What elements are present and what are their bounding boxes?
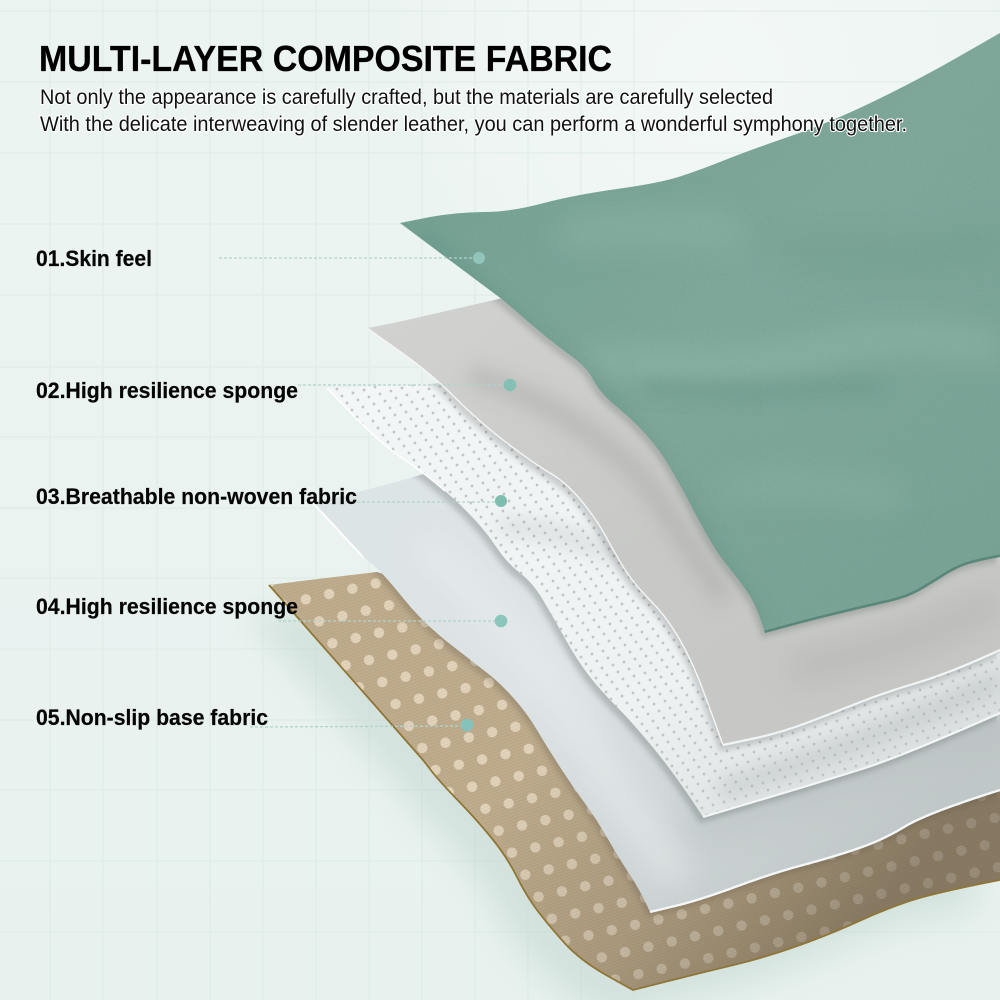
subtitle line 1: Not only the appearance is carefully crafted, but the materials are carefully selected (40, 86, 773, 109)
label 02: high resilience sponge (36, 378, 516, 403)
marker dot 03 (495, 495, 507, 507)
leader line 05 (250, 726, 466, 727)
fabric layer 5: non-slip base fabric (268, 572, 1000, 991)
marker dot 05 (461, 719, 473, 731)
label text 04: 04.High resilience sponge (36, 594, 298, 619)
leader line 04 (278, 620, 500, 622)
title: MULTI-LAYER COMPOSITE FABRIC (39, 38, 612, 79)
label text 01: 01.Skin feel (36, 246, 152, 271)
leader line 02 (298, 384, 509, 386)
marker dot 01 (473, 252, 485, 264)
label 05: non-slip base fabric (36, 705, 473, 731)
label text 05: 05.Non-slip base fabric (36, 705, 268, 730)
leader line 03 (357, 501, 500, 503)
soft shadow under the fabric stack (245, 600, 976, 1000)
label 04: high resilience sponge (36, 594, 507, 627)
subtitle text block (40, 86, 907, 136)
fabric layer 2: high resilience sponge (367, 298, 1000, 746)
label text 03: 03.Breathable non-woven fabric (36, 484, 357, 509)
marker dot 02 (504, 379, 516, 391)
label 01: skin feel (36, 246, 485, 271)
marker dot 04 (495, 615, 507, 627)
label text 02: 02.High resilience sponge (36, 378, 298, 403)
fabric layer 1: skin feel leather (400, 30, 1000, 640)
fabric layer 4: high resilience sponge (312, 474, 1000, 914)
label 03: breathable non-woven fabric (36, 484, 507, 509)
leader line 01 (219, 257, 478, 259)
fabric layer 3: breathable non-woven fabric (326, 383, 1000, 818)
subtitle line 2: With the delicate interweaving of slender leather, you can perform a wonderful symphony together. (40, 113, 907, 136)
